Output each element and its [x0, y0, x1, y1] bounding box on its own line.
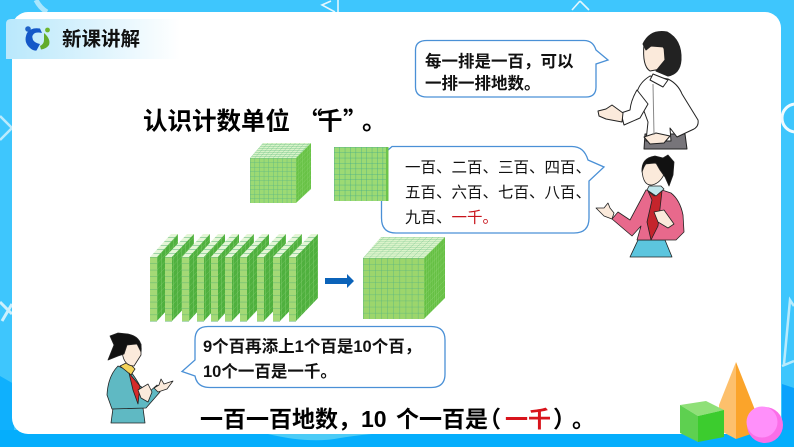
- figure: teacher: [598, 32, 698, 149]
- icon: cube: [680, 401, 724, 442]
- speech bubble: teacher: [416, 40, 608, 97]
- heading: 千: [318, 102, 342, 138]
- plate 6: [225, 234, 254, 322]
- speech bubble: counting hundreds: 五百、六百、七百、八百、: [405, 184, 591, 202]
- speech bubble: teacher: 每一排是一百，可以: [425, 52, 574, 71]
- speech bubble: counting hundreds: [382, 146, 604, 233]
- plate 8: [257, 234, 286, 322]
- decoration: 3D shapes: [680, 362, 783, 443]
- speech bubble: teacher: 一排一排地数。: [425, 74, 540, 93]
- stack of ten hundred plates: [150, 234, 318, 322]
- conclusion sentence: 。: [572, 406, 595, 432]
- speech bubble: nine hundreds plus one: [182, 326, 445, 388]
- small cube: one thousand: [250, 143, 311, 203]
- flat square: one hundred: [334, 147, 388, 201]
- conclusion sentence: 一百一百地数，10: [200, 406, 387, 432]
- arrow: [325, 274, 354, 288]
- conclusion sentence: 个一百是: [396, 406, 488, 432]
- plate 3: [182, 234, 210, 322]
- speech bubble: nine hundreds plus one: 9个百再添上1个百是10个百，: [203, 337, 421, 356]
- plate 1: [150, 234, 178, 322]
- speech bubble: nine hundreds plus one: 10个一百是一千。: [203, 362, 337, 381]
- speech bubble: counting hundreds: 一百、二百、三百、四百、: [405, 160, 591, 176]
- figure: girl in pink: [596, 155, 684, 257]
- header title: 新课讲解: [62, 28, 140, 50]
- plate 9: [273, 234, 302, 322]
- heading: “: [298, 102, 322, 138]
- icon: sphere: [746, 406, 783, 443]
- large cube: ten hundreds: [363, 237, 445, 319]
- figure: girl in teal: [107, 333, 173, 423]
- heading: 认识计数单位: [143, 102, 290, 138]
- conclusion sentence: （: [478, 406, 501, 432]
- plate 7: [240, 234, 269, 322]
- speech bubble: counting hundreds: 九百、一千。: [405, 208, 498, 226]
- plate 4: [197, 234, 225, 322]
- header bar: [6, 19, 180, 59]
- plate 10: [289, 234, 318, 322]
- heading: ”: [343, 102, 368, 138]
- icon: pyramid: [719, 362, 757, 439]
- plate 2: [165, 234, 194, 322]
- heading: 。: [362, 102, 386, 138]
- plate 5: [211, 234, 239, 322]
- conclusion sentence: ）: [553, 406, 576, 432]
- icon: logo: [25, 26, 50, 51]
- conclusion sentence: 一千: [505, 406, 551, 432]
